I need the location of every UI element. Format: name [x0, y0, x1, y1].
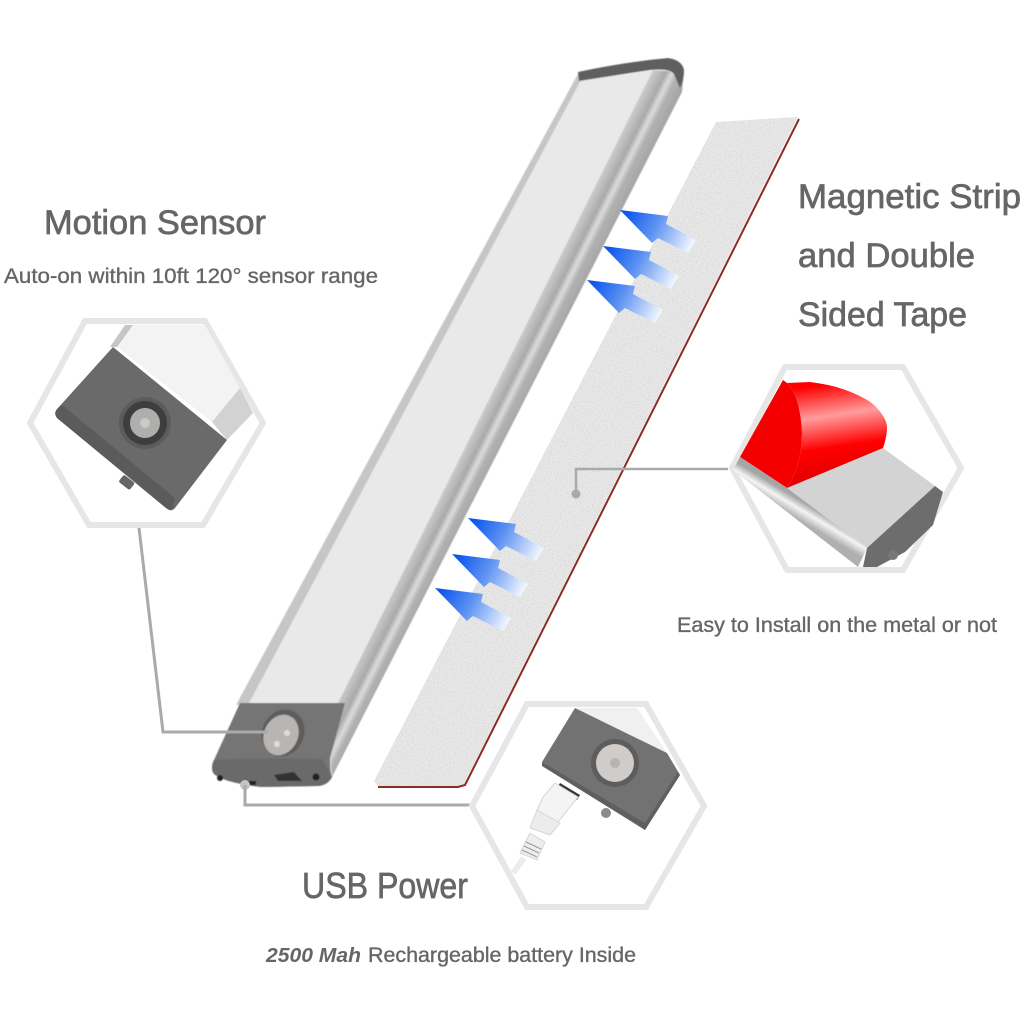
hexagon callout: motion sensor [30, 321, 263, 525]
silver rail right [212, 388, 253, 440]
subtext: battery capacity: Rechargeable battery Inside [368, 944, 636, 967]
hexagon frame [30, 321, 263, 525]
silver tube edge [733, 457, 867, 567]
switch nub [888, 550, 898, 560]
connector line: motion sensor [139, 528, 268, 732]
dark end cap [863, 486, 943, 567]
dark cap [55, 347, 227, 510]
right rail of bar [330, 70, 684, 777]
sensor lens [591, 739, 639, 787]
bottom end cap with sensor and ports [212, 702, 345, 787]
silver rail top [110, 325, 143, 347]
heading: Magnetic Strip and Double Sided Tape: and Double [798, 237, 975, 275]
blue arrows lower group [435, 518, 544, 631]
hexagon callout: USB [472, 704, 704, 907]
panel face [575, 708, 667, 753]
heading: Motion Sensor: Motion Sensor [44, 204, 266, 242]
small screw right [312, 774, 320, 780]
heading: USB Power: USB Power [302, 865, 468, 906]
switch slot [248, 781, 256, 785]
hexagon frame [472, 704, 704, 907]
sensor lens [119, 397, 171, 449]
small screw left [217, 775, 223, 781]
subtext: battery capacity: 2500 Mah [265, 945, 361, 967]
USB plug and cable [513, 783, 580, 873]
hexagon callout: tape [732, 367, 961, 570]
LED light bar [212, 58, 684, 787]
panel face [117, 325, 240, 422]
light panel face [248, 70, 653, 705]
switch nub [118, 475, 135, 490]
dark cap [542, 708, 680, 830]
switch nub [601, 808, 611, 818]
connector line: magnetic strip [572, 469, 728, 498]
gray magnetic surface [787, 448, 935, 548]
red tape curl [787, 382, 887, 488]
motion sensor lens [254, 702, 312, 764]
USB port [274, 772, 302, 781]
magnetic strip with double sided tape [374, 117, 799, 787]
connector line: USB power [240, 780, 470, 805]
heading: Magnetic Strip and Double Sided Tape: Sided Tape [798, 296, 967, 334]
subtext: sensor range: Auto-on within 10ft 120° sensor range [4, 265, 378, 288]
hexagon frame [732, 367, 961, 570]
left rail of bar [236, 72, 586, 705]
red tape flat [740, 380, 802, 488]
subtext: easy to install: Easy to Install on the metal or not [677, 614, 997, 637]
blue arrows upper group [587, 210, 696, 323]
heading: Magnetic Strip and Double Sided Tape: Magnetic Strip [798, 178, 1021, 216]
heading: Magnetic Strip and Double Sided Tape [798, 178, 1021, 334]
top end cap [578, 58, 684, 88]
